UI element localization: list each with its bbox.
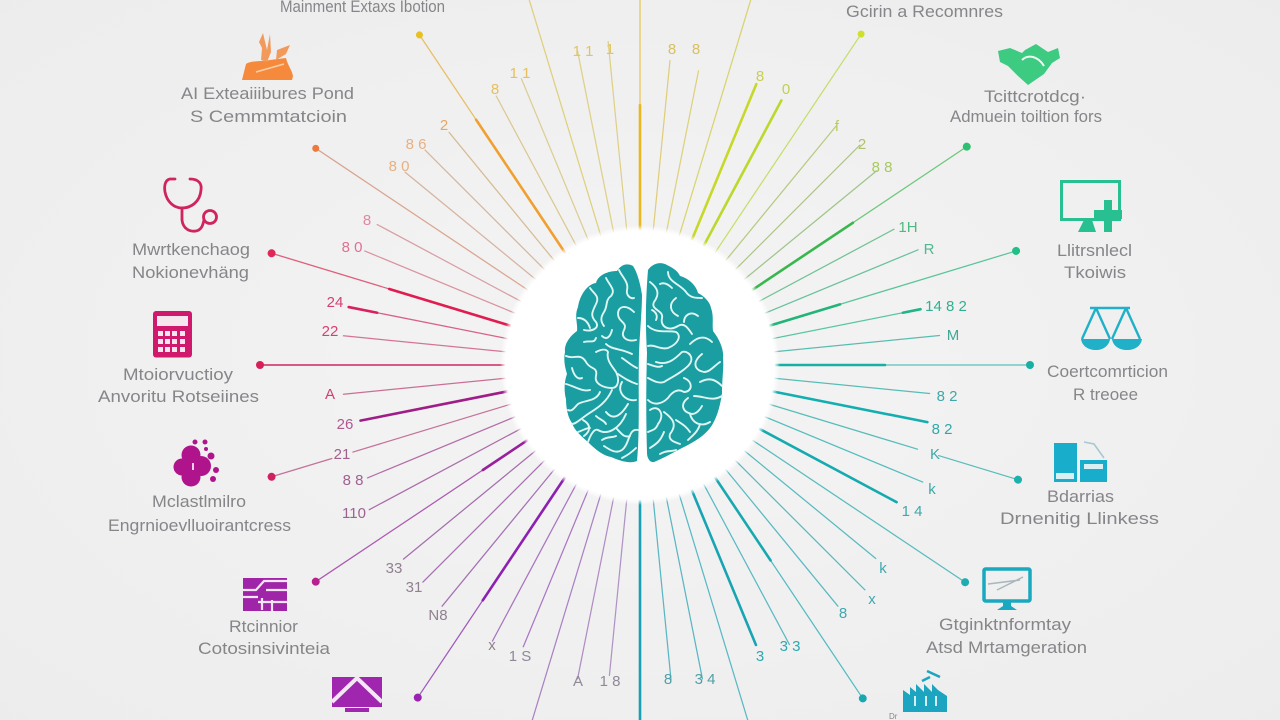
title label top right: Gcirin a Recomnres: [846, 2, 1003, 21]
icon: purple monitor with chevron: [332, 677, 382, 712]
label: literacy: Llitrsnlecl: [1057, 241, 1132, 260]
numeric labels: 8: [692, 41, 700, 58]
numeric labels: 8 2: [932, 421, 952, 438]
numeric labels: 22: [322, 323, 338, 340]
label: construction: R treoee: [1073, 385, 1138, 404]
numeric labels: 8 6: [406, 136, 426, 153]
numeric labels: 8: [756, 68, 764, 85]
numeric labels: 1 4: [902, 503, 922, 520]
numeric labels: K: [930, 446, 940, 463]
label: business: [1000, 487, 1159, 528]
numeric labels: 3 3: [780, 638, 800, 655]
numeric labels: M: [947, 327, 959, 344]
label: literacy: [1057, 241, 1132, 282]
numeric labels: 8: [491, 81, 499, 98]
label: marketing: Mwrtkenchaog: [132, 240, 250, 259]
numeric labels: 8 0: [342, 239, 362, 256]
numeric labels: f: [835, 118, 840, 135]
label: information: Gtginktnformtay: [939, 615, 1072, 634]
label: exteaiiibures: AI Exteaiiibures Pond: [181, 84, 354, 103]
center white circle: [500, 225, 780, 505]
label: business: Drnenitig Llinkess: [1000, 509, 1159, 528]
icon: orange tools: [242, 33, 293, 80]
numeric labels: 8: [839, 605, 847, 622]
label: partnership: Admuein toiltion fors: [950, 107, 1102, 126]
numeric labels: 31: [406, 579, 422, 596]
label: partnership: [950, 87, 1102, 126]
icon: handshake: [998, 44, 1060, 85]
radial lines: [260, 0, 1030, 720]
sulci: [566, 270, 722, 458]
numeric labels: k: [879, 560, 887, 577]
numeric labels: 110: [342, 505, 366, 522]
numeric labels: 8 8: [872, 159, 892, 176]
numeric labels: 33: [386, 560, 402, 577]
icon: scale: [1081, 308, 1142, 350]
numeric labels: 1 S: [509, 648, 531, 665]
label: partnership: Tcittcrotdcg·: [984, 87, 1086, 106]
numeric labels: 2: [440, 117, 448, 134]
label: engineering: Mclastlmilro: [152, 492, 246, 511]
numeric labels: A: [573, 673, 583, 690]
numeric labels: 21: [334, 446, 350, 463]
label: engineering: [108, 492, 291, 535]
numeric labels: 24: [327, 294, 343, 311]
label: construction: Coertcomrticion: [1047, 362, 1168, 381]
numeric labels: 8: [363, 212, 371, 229]
numeric labels: x: [488, 637, 496, 654]
brain: [564, 263, 723, 462]
label: accounting: [98, 365, 259, 406]
label: resource: [198, 617, 331, 658]
icon: flower: [174, 440, 219, 486]
icon: factory: [903, 671, 947, 712]
numeric labels: 1H: [898, 219, 918, 236]
numeric labels: x: [868, 591, 876, 608]
numeric labels: 14 8 2: [925, 298, 967, 315]
label: construction: [1047, 362, 1168, 404]
icon: teal building: [1054, 442, 1107, 482]
label: marketing: [132, 240, 250, 282]
numeric labels: 3: [756, 648, 764, 665]
numeric labels: 1 8: [600, 673, 620, 690]
numeric labels: 2: [858, 136, 866, 153]
numeric labels: A: [325, 386, 335, 403]
numeric labels: 0: [782, 81, 790, 98]
numeric labels: R: [924, 241, 935, 258]
numeric labels: 1 1: [573, 43, 593, 60]
numeric labels: 8 0: [389, 158, 409, 175]
icon: purple panel: [243, 578, 287, 611]
numeric labels: 1: [606, 41, 614, 58]
label: exteaiiibures: [181, 84, 354, 126]
numeric labels: k: [928, 481, 936, 498]
numeric labels: 8: [664, 671, 672, 688]
right hemisphere: [646, 263, 723, 462]
icon: stethoscope: [165, 179, 216, 231]
left hemisphere: [564, 264, 642, 462]
label: resource: Cotosinsivinteia: [198, 639, 331, 658]
numeric labels: 8 8: [343, 472, 363, 489]
label: information: Atsd Mrtamgeration: [926, 638, 1087, 657]
label: resource: Rtcinnior: [229, 617, 298, 636]
numeric labels: 8 2: [937, 388, 957, 405]
label: business: Bdarrias: [1047, 487, 1114, 506]
numeric labels: 3 4: [695, 671, 715, 688]
numeric labels: [322, 41, 967, 690]
label: engineering: Engrnioevlluoirantcress: [108, 516, 291, 535]
label: accounting: Anvoritu Rotseiines: [98, 387, 259, 406]
label: marketing: Nokionevhäng: [132, 263, 249, 282]
icon: green monitor with plus: [1062, 182, 1122, 232]
icon: calculator: [153, 311, 192, 358]
label: literacy: Tkoiwis: [1064, 263, 1126, 282]
numeric labels: 26: [337, 416, 353, 433]
label: accounting: Mtoiorvuctioy: [123, 365, 234, 384]
icon: teal monitor: [984, 569, 1030, 610]
label: information: [926, 615, 1087, 657]
line end dots: [256, 29, 1034, 704]
numeric labels: N8: [428, 607, 448, 624]
numeric labels: 1 1: [510, 65, 530, 82]
label: exteaiiibures: S Cemmmtatcioin: [190, 107, 347, 126]
numeric labels: 8: [668, 41, 676, 58]
